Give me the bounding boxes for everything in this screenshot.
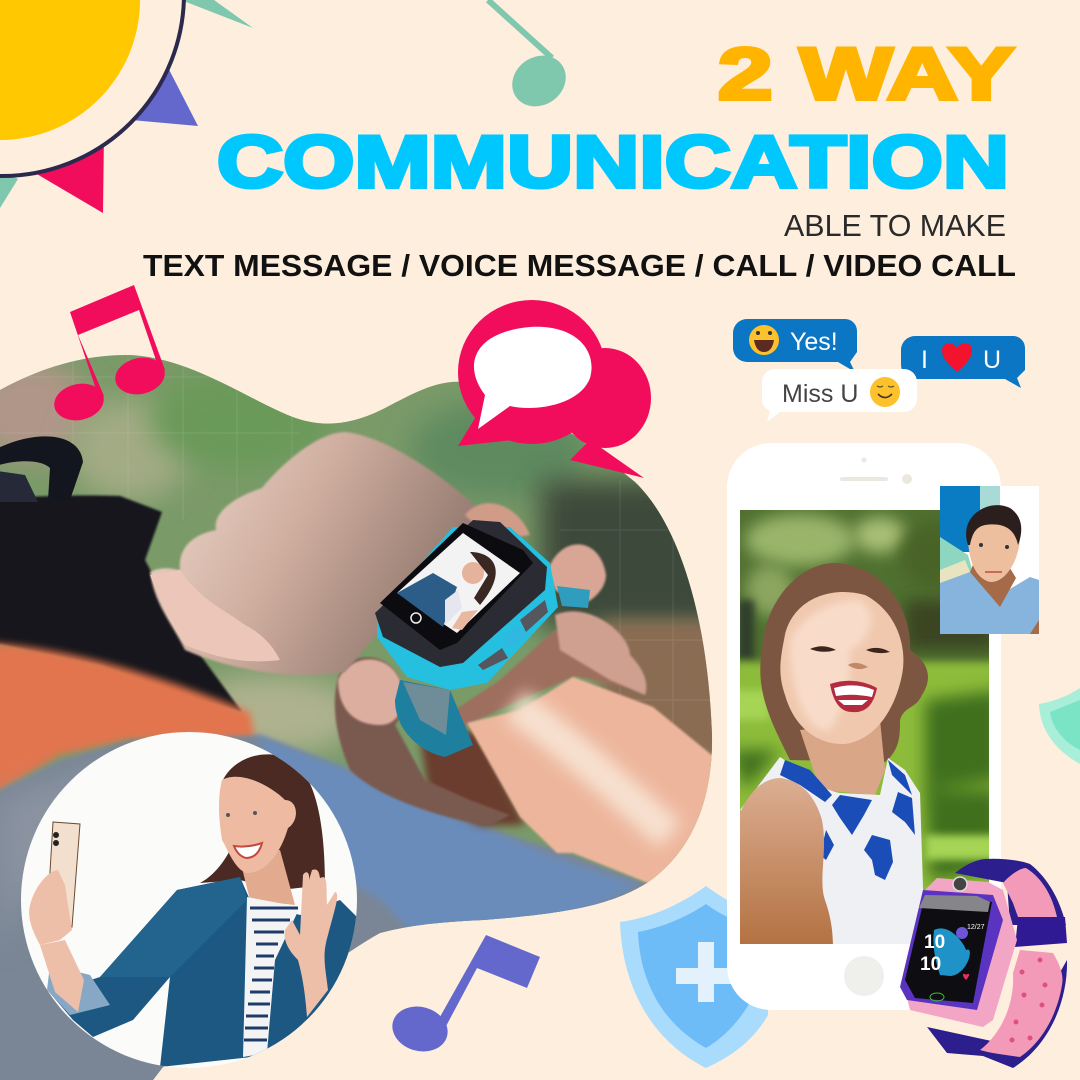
pink kids smartwatch	[900, 859, 1067, 1068]
face	[780, 592, 903, 744]
watch button	[504, 628, 525, 648]
phone	[727, 443, 1039, 1010]
shirt	[940, 572, 1039, 634]
watch screen	[905, 895, 992, 1003]
subtitle: ABLE TO MAKE	[784, 208, 1006, 243]
lower hand thumb	[335, 657, 510, 826]
feature list: TEXT MESSAGE / VOICE MESSAGE / CALL / VIDEO CALL	[143, 248, 1016, 283]
watch screen	[380, 523, 533, 650]
grid lines	[0, 355, 710, 724]
music note: purple bottom	[387, 935, 540, 1057]
pink kids smartwatch: 10	[920, 954, 941, 975]
neck	[800, 720, 885, 795]
neck and face	[240, 850, 295, 905]
bokeh trees	[745, 514, 855, 566]
denim jacket	[50, 877, 357, 1067]
head	[968, 519, 1020, 582]
watch speaker grills	[478, 600, 548, 670]
fist	[150, 432, 490, 675]
title line: 2 WAY: 2 WAY	[718, 34, 1014, 115]
phone screen: girl video call	[730, 510, 1000, 952]
emoji: smile	[870, 377, 900, 407]
selfie arm	[40, 940, 84, 1012]
band: purple top	[955, 859, 1066, 925]
music note: pink left	[51, 285, 168, 425]
wrist shaded	[458, 629, 622, 728]
speech bubbles: pink with white	[458, 300, 651, 478]
band: purple lower	[927, 960, 1067, 1068]
chat bubble: Yes: Yes!	[790, 328, 838, 356]
watch case	[905, 878, 1017, 1027]
watch body	[377, 527, 558, 690]
chat bubble: I love U: I	[921, 346, 928, 374]
shield: mint, right edge	[1039, 688, 1080, 764]
grass	[740, 656, 989, 890]
forearm	[466, 676, 712, 884]
waving hand	[285, 869, 337, 1017]
chat bubble: Miss U: Miss U	[782, 380, 858, 408]
hair	[760, 563, 928, 762]
watch camera	[953, 877, 967, 891]
band: buckle strap	[1015, 917, 1067, 947]
dress	[740, 757, 925, 950]
watch face art	[933, 928, 970, 976]
arm	[740, 778, 833, 950]
chat bubble: I love U	[901, 336, 1025, 388]
selfie hand	[29, 870, 72, 945]
dark under wrist	[420, 730, 525, 826]
sun with bunting flags	[0, 0, 253, 213]
dark jacket	[0, 436, 242, 712]
blue strap	[395, 680, 473, 757]
pink kids smartwatch: 10	[924, 932, 945, 953]
shield with plus	[620, 886, 770, 1068]
inset photo: man	[940, 486, 1039, 634]
blue floral pattern	[780, 760, 915, 880]
watch on wrist	[375, 520, 558, 690]
phone in hand	[47, 822, 80, 927]
photo circle: woman with phone	[20, 730, 360, 1070]
blurred backdrop	[0, 340, 730, 1080]
striped shirt	[243, 897, 300, 1057]
band: pink	[1003, 868, 1057, 917]
pink kids smartwatch: 12/27	[967, 924, 985, 931]
title line: COMMUNICATION: COMMUNICATION	[217, 122, 1009, 203]
chat bubble: I love U: U	[983, 346, 1001, 374]
grip fingers	[465, 503, 530, 540]
music note: teal top	[488, 0, 576, 117]
icon: heart	[942, 343, 972, 372]
chat bubble: Miss U	[762, 369, 917, 422]
home button	[844, 956, 884, 996]
main photo: hand with smartwatch	[0, 340, 730, 1080]
orange sleeve	[0, 642, 255, 810]
chat bubble: Yes	[733, 319, 857, 372]
emoji: grin	[749, 325, 779, 355]
hair	[200, 754, 325, 890]
blue grey sleeve	[0, 735, 660, 1080]
